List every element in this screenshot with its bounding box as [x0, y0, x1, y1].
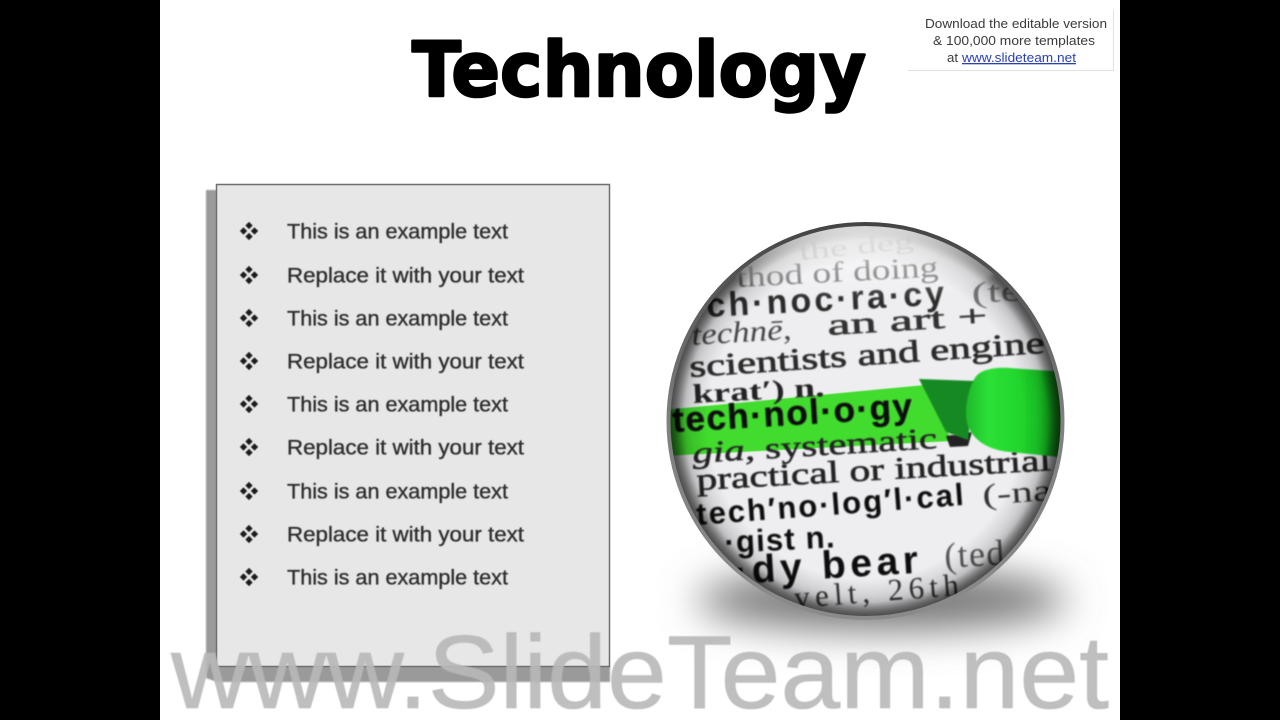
bullet items: This is an example text — [287, 394, 508, 416]
dictionary text: thod of doing — [736, 251, 939, 294]
download callout: at — [947, 50, 958, 65]
sphere rim — [668, 224, 1062, 618]
sphere top glare — [735, 226, 996, 298]
bullet items: This is an example text — [287, 220, 508, 244]
white slide background — [160, 0, 1120, 720]
dictionary text: krat′) n. — [692, 372, 825, 409]
download callout — [908, 10, 1114, 71]
bullet items: This is an example text — [287, 566, 508, 590]
dictionary text: tech′no·log′l·cal — [695, 477, 965, 532]
bullet items: Replace it with your text — [287, 264, 524, 288]
panel shadow — [206, 190, 610, 682]
bullet items: Replace it with your text — [287, 436, 524, 460]
dictionary text: ·gist n. — [724, 519, 835, 560]
dictionary text: ·dy bear — [733, 539, 919, 593]
slide — [160, 0, 1120, 720]
bullet items: Replace it with your text — [287, 524, 524, 546]
bullet items — [240, 220, 524, 590]
download callout: www.slideteam.net — [961, 50, 1076, 65]
download callout: & 100,000 more templates — [933, 33, 1096, 48]
dictionary text: an art + — [826, 299, 988, 342]
bullet items: This is an example text — [287, 480, 508, 504]
dictionary text: gia, systematic — [691, 422, 938, 470]
dictionary text: (-na — [981, 474, 1053, 512]
highlighter band — [664, 385, 952, 456]
panel box — [216, 184, 610, 666]
sphere edge shading — [668, 224, 1062, 618]
icon: dictionary sphere — [664, 222, 1068, 618]
icon: marker body — [966, 368, 1068, 458]
bullet items: Replace it with your text — [287, 350, 524, 374]
dictionary text: scientists and engine — [688, 325, 1046, 384]
sphere ground shadow — [697, 570, 1067, 630]
sphere inner vignette — [672, 227, 1060, 615]
bullet items: This is an example text — [287, 308, 508, 330]
dictionary text: practical or industrial — [695, 442, 1052, 497]
download callout: Download the editable version — [925, 16, 1107, 31]
dictionary text: (te — [971, 274, 1022, 310]
dictionary text: velt, 26th — [793, 567, 961, 615]
dictionary text: ch·noc·ra·cy — [705, 275, 945, 325]
dictionary text: tech·nol·o·gy — [671, 387, 914, 440]
panel: text list — [206, 184, 610, 682]
dictionary text — [671, 228, 1053, 615]
sphere contents — [664, 222, 1068, 618]
icon: marker tip — [919, 379, 975, 440]
title: Technology — [412, 25, 866, 114]
dictionary text: the deg — [798, 228, 916, 265]
dictionary text: (ted — [943, 532, 1005, 576]
dictionary text: technē, — [690, 313, 792, 352]
